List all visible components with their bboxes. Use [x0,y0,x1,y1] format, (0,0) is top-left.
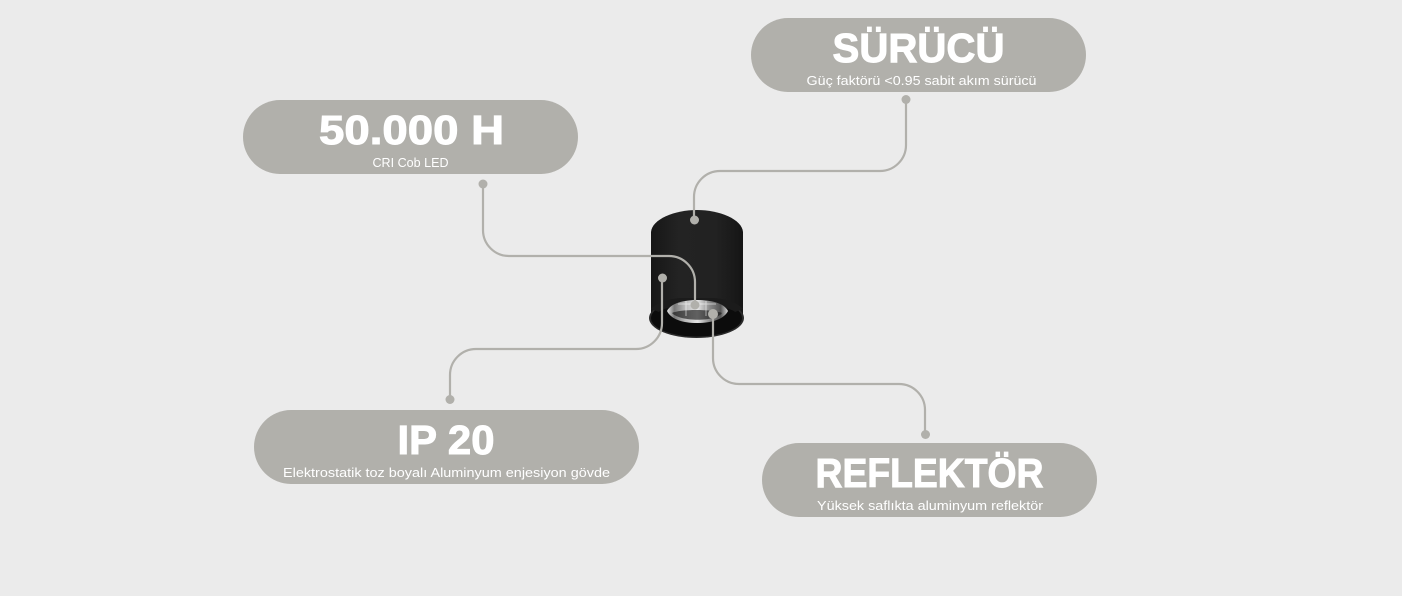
text: 50.000 H description: CRI Cob LED [372,155,448,170]
panel: Sürücü [751,18,1086,92]
connector: Reflektör [708,309,930,439]
connector: IP 20 [446,274,667,404]
text: IP 20 description: Elektrostatik toz boyalı Aluminyum enjesiyon gövde [283,465,610,480]
heading: Reflektör: REFLEKTÖR [816,450,1044,496]
connector: Sürücü [690,95,910,224]
heading: Sürücü: SÜRÜCÜ [832,25,1004,71]
connector: 50.000 H [478,180,700,310]
text: Sürücü description: Güç faktörü <0.95 sabit akım sürücü [806,73,1036,88]
panel: 50.000 H [243,100,578,174]
heading: 50.000 H: 50.000 H [319,107,504,153]
panel: Reflektör [762,443,1097,517]
icon: black cylinder downlight [649,210,744,338]
panel: IP 20 [254,410,639,484]
text: Reflektör description: Yüksek saflıkta aluminyum reflektör [817,498,1044,513]
heading: IP 20: IP 20 [398,417,494,463]
